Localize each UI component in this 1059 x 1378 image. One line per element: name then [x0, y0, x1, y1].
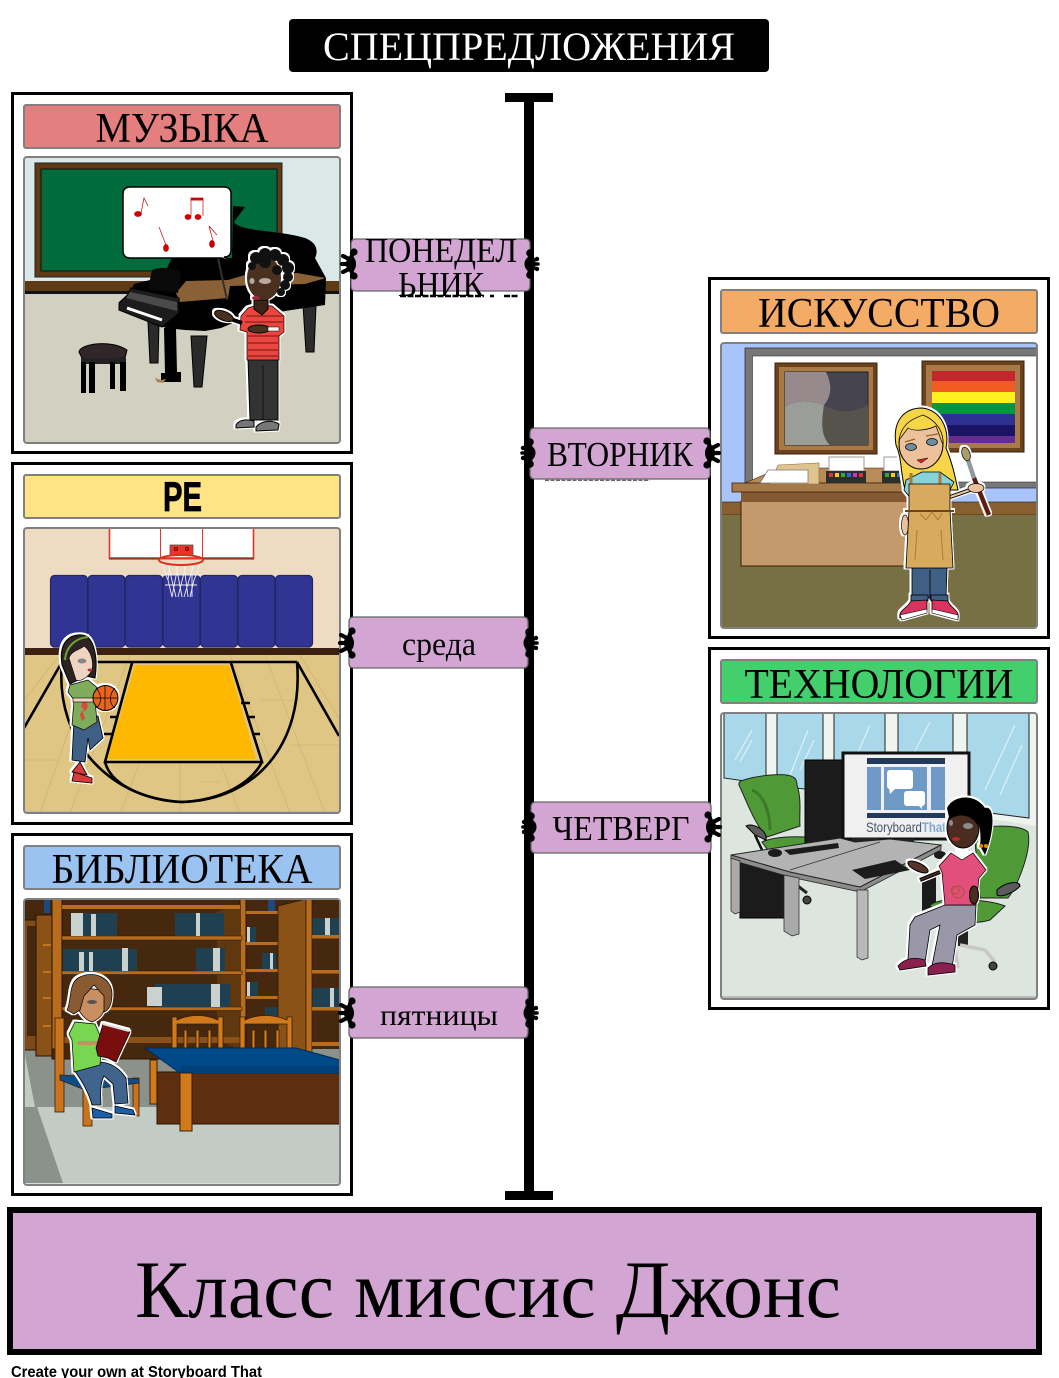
basketball hoop	[109, 524, 254, 597]
scene: computer lab	[721, 713, 1037, 999]
heading: library: БИБЛИОТЕКА	[52, 847, 313, 893]
main monitor with logo: StoryboardThat	[866, 819, 946, 835]
heading: PE: PE	[163, 473, 202, 520]
heading: music	[24, 105, 340, 152]
tab: Friday	[340, 987, 538, 1038]
character: boy reading	[67, 974, 135, 1118]
piano	[119, 206, 326, 387]
floor boards	[24, 655, 340, 813]
panel: PE	[12, 464, 352, 824]
key painted area	[107, 665, 256, 759]
tab: Wednesday	[340, 617, 538, 668]
tab: Thursday	[522, 802, 720, 853]
reader chair	[55, 1018, 139, 1126]
heading: technology: ТЕХНОЛОГИИ	[744, 662, 1014, 708]
character: girl seated	[898, 797, 992, 975]
speech bubble with notes	[122, 186, 232, 260]
heading: music: МУЗЫКА	[96, 106, 269, 152]
tab: Monday: ЬНИК	[398, 265, 485, 304]
desk with computer	[731, 838, 946, 960]
character: boy in red shirt	[213, 248, 294, 431]
wall pads	[50, 576, 312, 647]
panel: library	[12, 834, 352, 1194]
tab: Monday	[342, 231, 539, 304]
scene: gym	[24, 524, 340, 814]
scene: music room	[24, 157, 340, 444]
tab: Tuesday: ВТОРНИК	[547, 435, 694, 474]
court lines	[24, 662, 339, 802]
tab: Wednesday: среда	[402, 627, 476, 663]
painting: abstract	[775, 363, 877, 454]
tab: Tuesday	[521, 428, 719, 480]
class name banner	[10, 1210, 1039, 1352]
panel: music	[12, 94, 352, 452]
heading: art: ИСКУССТВО	[758, 291, 1000, 337]
character: blonde girl with paintbrush	[895, 408, 989, 620]
left office chair	[739, 775, 815, 904]
scene: library	[24, 899, 340, 1186]
desk	[732, 468, 906, 566]
heading: PE	[24, 473, 340, 520]
panel: technology	[710, 648, 1048, 1008]
right office chair	[930, 826, 1029, 970]
tab: Thursday: ЧЕТВЕРГ	[552, 809, 690, 848]
books	[63, 913, 340, 1022]
reading table	[145, 1048, 340, 1131]
table chairs	[172, 1016, 292, 1050]
tab: Monday: ПОНЕДЕЛ	[365, 231, 517, 270]
painting: rainbow	[922, 361, 1024, 452]
bookshelves	[24, 899, 340, 1059]
main monitor with logo	[842, 752, 970, 842]
tab: Friday: пятницы	[380, 999, 498, 1032]
class name banner: Класс миссис Джонс	[135, 1244, 841, 1335]
art supplies	[760, 457, 909, 484]
windows	[724, 713, 1029, 818]
panel: art	[710, 278, 1048, 638]
scene: art room	[721, 343, 1042, 628]
character: girl with basketball	[61, 635, 118, 783]
black tower monitor	[804, 760, 842, 843]
timeline spine	[505, 93, 553, 1200]
piano bench	[79, 344, 127, 393]
title banner: СПЕЦПРЕДЛОЖЕНИЯ	[323, 24, 735, 69]
